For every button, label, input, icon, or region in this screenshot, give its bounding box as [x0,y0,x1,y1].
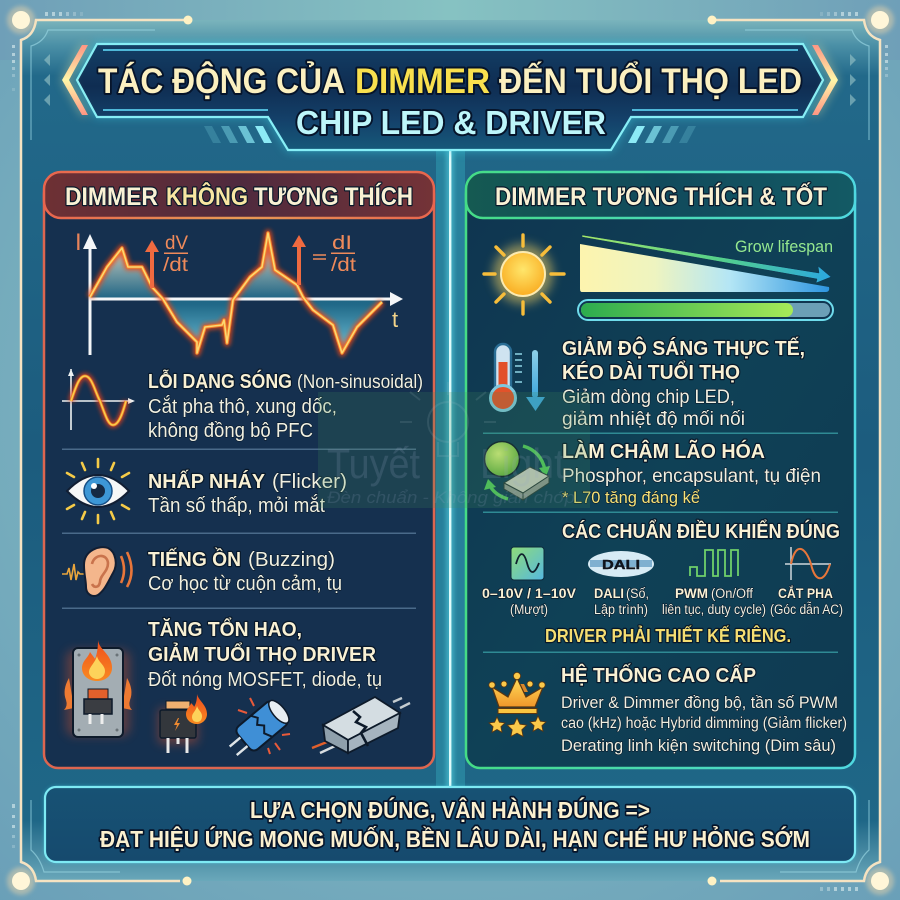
chart: brightness drop [580,235,833,292]
text: flicker: Tần số thấp, mỏi mắt [148,494,325,517]
chart: distorted waveform: dV [165,233,188,254]
text: waveform error: Cắt pha thô, xung dốc, [148,395,337,418]
footer banner: ĐẠT HIỆU ỨNG MONG MUỐN, BỀN LÂU DÀI, HẠN CHẾ HƯ HỎNG SỚM [100,824,810,852]
text: premium system: Derating linh kiện switching (Dim sâu) [561,736,836,755]
standard: DALI: DALI [602,557,640,572]
text: slow aging [562,439,821,507]
standard: phase cut: (Góc dẫn AC) [770,602,843,617]
text: buzzing [148,547,342,595]
banner chevrons [62,45,838,115]
text: flicker: (Flicker) [272,471,347,493]
panel: compatible dimmer [466,172,855,768]
title line 1: ĐẾN TUỔI THỌ LED [499,61,802,101]
watermark [318,382,590,508]
standard: DALI: DALI [594,585,624,601]
text: waveform error: (Non-sinusoidal) [297,372,423,393]
header: compatible: DIMMER TƯƠNG THÍCH & TỐT [495,181,827,211]
icon: sun [484,235,564,314]
icon: eye [67,459,129,523]
heading: control standards: CÁC CHUẨN ĐIỀU KHIỂN ĐÚNG [562,519,840,543]
standard: PWM: PWM [675,585,708,601]
text: buzzing: TIẾNG ỒN [148,547,241,571]
title line 1: DIMMER [355,62,490,101]
note: driver design: DRIVER PHẢI THIẾT KẾ RIÊNG. [545,625,791,646]
text: premium system: HỆ THỐNG CAO CẤP [561,663,756,687]
title line 2: CHIP LED & DRIVER [296,104,606,141]
text: reduce real brightness: giảm nhiệt độ mối nối [562,408,745,430]
chart: distorted waveform: /dt [331,255,357,276]
text: driver losses: GIẢM TUỔI THỌ DRIVER [148,642,377,666]
watermark: Đèn chuẩn - Không gián chớp [327,488,575,507]
text: slow aging: Phosphor, encapsulant, tụ điện [562,465,821,487]
standard: phase cut: CẮT PHA [778,584,833,601]
standard: 0-10V [482,547,577,617]
header: compatible [466,172,855,218]
title line 1: TÁC ĐỘNG CỦA [98,61,345,101]
icon: thermometer with arrow [490,344,545,411]
standard: PWM: liên tục, duty cycle) [662,602,766,617]
chart: distorted waveform [75,229,403,355]
header: incompatible: DIMMER [65,183,158,211]
icon: cracked capacitor [223,697,293,762]
text: driver losses: Đốt nóng MOSFET, diode, tụ [148,669,382,691]
standard: PWM [662,550,766,617]
chart: distorted waveform: I [75,229,82,256]
icon: green phosphor and LED chip [484,442,550,500]
header: incompatible: KHÔNG [166,181,248,211]
chart: distorted waveform: /dt [163,255,189,276]
panel: incompatible dimmer [44,172,434,768]
text: flicker: NHẤP NHÁY [148,470,266,493]
footer banner [44,786,856,863]
header: incompatible: TƯƠNG THÍCH [254,182,413,211]
text: premium system: Driver & Dimmer đồng bộ, tần số PWM [561,693,838,712]
standard: PWM: (On/Off [711,586,753,601]
icon: crown and stars [489,672,546,737]
standard: phase cut [770,547,843,617]
text: premium system [561,663,847,755]
text: waveform error [148,369,423,442]
footer banner: LỰA CHỌN ĐÚNG, VẬN HÀNH ĐÚNG => [250,796,650,823]
title line 1 [98,61,802,101]
text: reduce real brightness: Giảm dòng chip LED, [562,386,735,408]
chart: distorted waveform: t [392,307,398,332]
standard: 0-10V: 0–10V / 1–10V [482,585,577,601]
chart: brightness drop: Grow lifespan [735,238,833,256]
text: waveform error: LỖI DẠNG SÓNG [148,369,292,393]
icon: overheated driver board [64,640,132,737]
watermark: Light [480,440,565,487]
icon: broken driver box [312,697,410,753]
watermark: Tuyết [327,440,420,487]
standard: DALI: (Số, [626,586,649,601]
chart: distorted waveform: dI [332,233,352,254]
text: buzzing: Cơ học từ cuộn cảm, tụ [148,573,342,595]
standard: 0-10V: (Mượt) [510,602,548,617]
text: reduce real brightness: GIẢM ĐỘ SÁNG THỰC TẾ, [562,336,805,360]
text: waveform error: không đồng bộ PFC [148,420,313,442]
text: slow aging: * L70 tăng đáng kể [562,488,700,507]
standard: DALI [588,551,654,617]
header: incompatible [44,172,434,218]
icon: burning MOSFET [158,694,207,753]
text: reduce real brightness [562,336,805,430]
center divider line [436,150,465,788]
text: driver losses [148,617,382,691]
icon: sine wave [62,369,135,430]
text: buzzing: (Buzzing) [248,549,335,571]
standard: DALI: Lập trình) [594,602,648,617]
icon: ear [62,547,132,596]
text: premium system: cao (kHz) hoặc Hybrid dimming (Giảm flicker) [561,715,847,732]
text: driver losses: TĂNG TỔN HAO, [148,617,302,641]
text: reduce real brightness: KÉO DÀI TUỔI THỌ [562,360,740,384]
banner stripes [204,126,696,143]
lifespan progress bar [578,300,833,320]
title banner [62,43,838,151]
text: slow aging: LÀM CHẬM LÃO HÓA [562,439,765,463]
text: flicker [148,470,347,517]
